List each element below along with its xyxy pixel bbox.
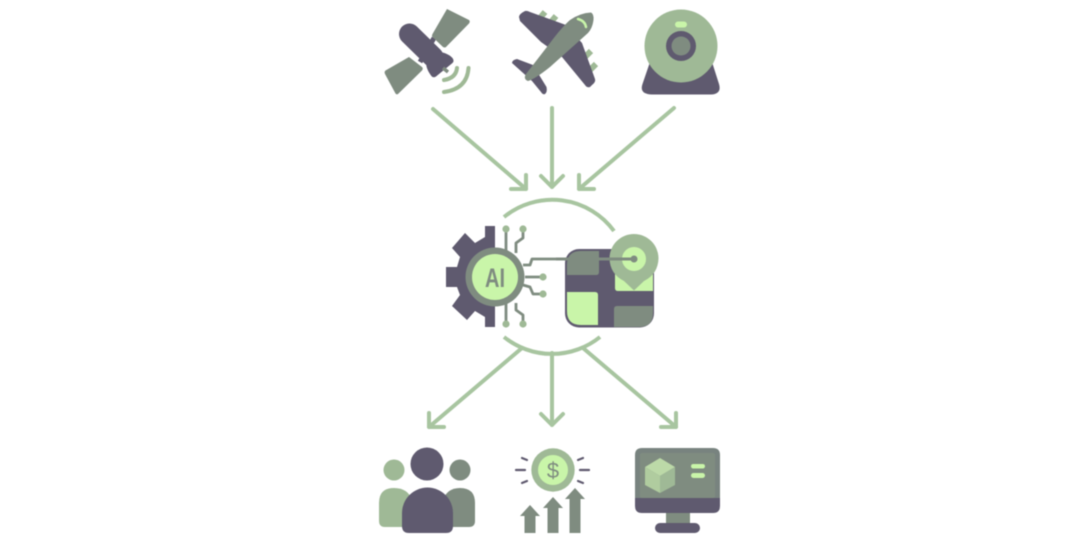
arrow: AI to finance	[541, 353, 563, 425]
icon: computer monitor with cube	[635, 448, 720, 533]
icon: airplane	[512, 11, 596, 94]
icon: satellite	[385, 9, 470, 94]
arrow: AI to monitor	[583, 348, 676, 427]
ring arc: bottom	[504, 337, 600, 354]
text: AI: AI	[485, 263, 505, 293]
arrow: satellite to AI	[433, 109, 526, 189]
text: dollar sign: $	[547, 458, 559, 483]
icon: map with pin	[556, 234, 658, 328]
arrow: airplane to AI	[541, 108, 563, 187]
ring arc: top	[504, 200, 614, 231]
icon: dollar coin and growth arrows	[516, 448, 589, 533]
arrow: AI to people	[429, 348, 522, 427]
icon: webcam	[642, 10, 720, 94]
icon: people group	[379, 448, 475, 533]
arrow: webcam to AI	[579, 108, 674, 189]
icon: AI gear	[446, 225, 558, 328]
